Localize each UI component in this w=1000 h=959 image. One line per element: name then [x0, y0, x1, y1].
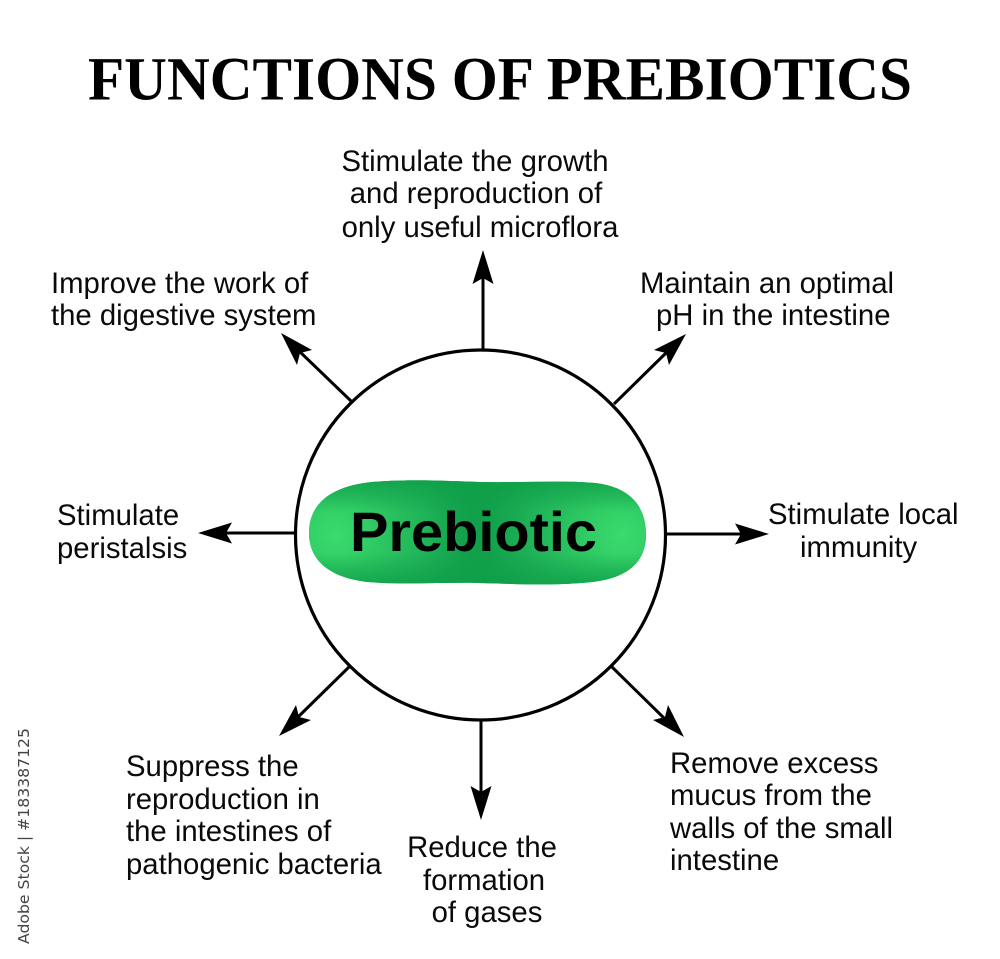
arrow: bottom [470, 721, 492, 820]
label: bottom left: the intestines of [126, 815, 332, 848]
label: left: peristalsis [57, 532, 187, 565]
label: left: Stimulate [57, 499, 179, 532]
arrow: left [198, 522, 295, 544]
title: FUNCTIONS OF PREBIOTICS [88, 46, 912, 114]
label: top: and reproduction of [350, 177, 603, 210]
label: top left: the digestive system [51, 299, 316, 332]
arrow: bottom right [612, 667, 684, 737]
stock image id: Adobe Stock | #183387125 [15, 728, 33, 944]
label: top right: pH in the intestine [656, 299, 891, 332]
label: bottom left: pathogenic bacteria [126, 848, 382, 881]
arrow: top left [281, 333, 351, 401]
central circle [296, 350, 666, 720]
arrow: top right [614, 334, 686, 404]
label: top: Stimulate the growth [341, 145, 609, 178]
arrow: right [667, 524, 769, 544]
label: top: only useful microflora [342, 211, 619, 244]
label: bottom right: mucus from the [670, 779, 872, 812]
label: bottom: of gases [432, 896, 542, 929]
arrow: bottom left [279, 667, 349, 736]
label: bottom left: Suppress the [126, 750, 299, 783]
label: bottom right: walls of the small [669, 812, 893, 845]
arrow: top [472, 250, 494, 349]
label: right: Stimulate local [768, 498, 959, 531]
label: right: immunity [800, 531, 918, 564]
label: bottom right: intestine [670, 844, 779, 877]
label: bottom: Reduce the [407, 831, 557, 864]
label: top right: Maintain an optimal [640, 267, 894, 300]
label: bottom: formation [423, 864, 545, 897]
label: bottom left: reproduction in [126, 783, 320, 816]
green prebiotic bacterium [309, 480, 646, 584]
label: top left: Improve the work of [51, 267, 309, 300]
prebiotic label: Prebiotic [350, 500, 597, 563]
label: bottom right: Remove excess [670, 747, 878, 780]
